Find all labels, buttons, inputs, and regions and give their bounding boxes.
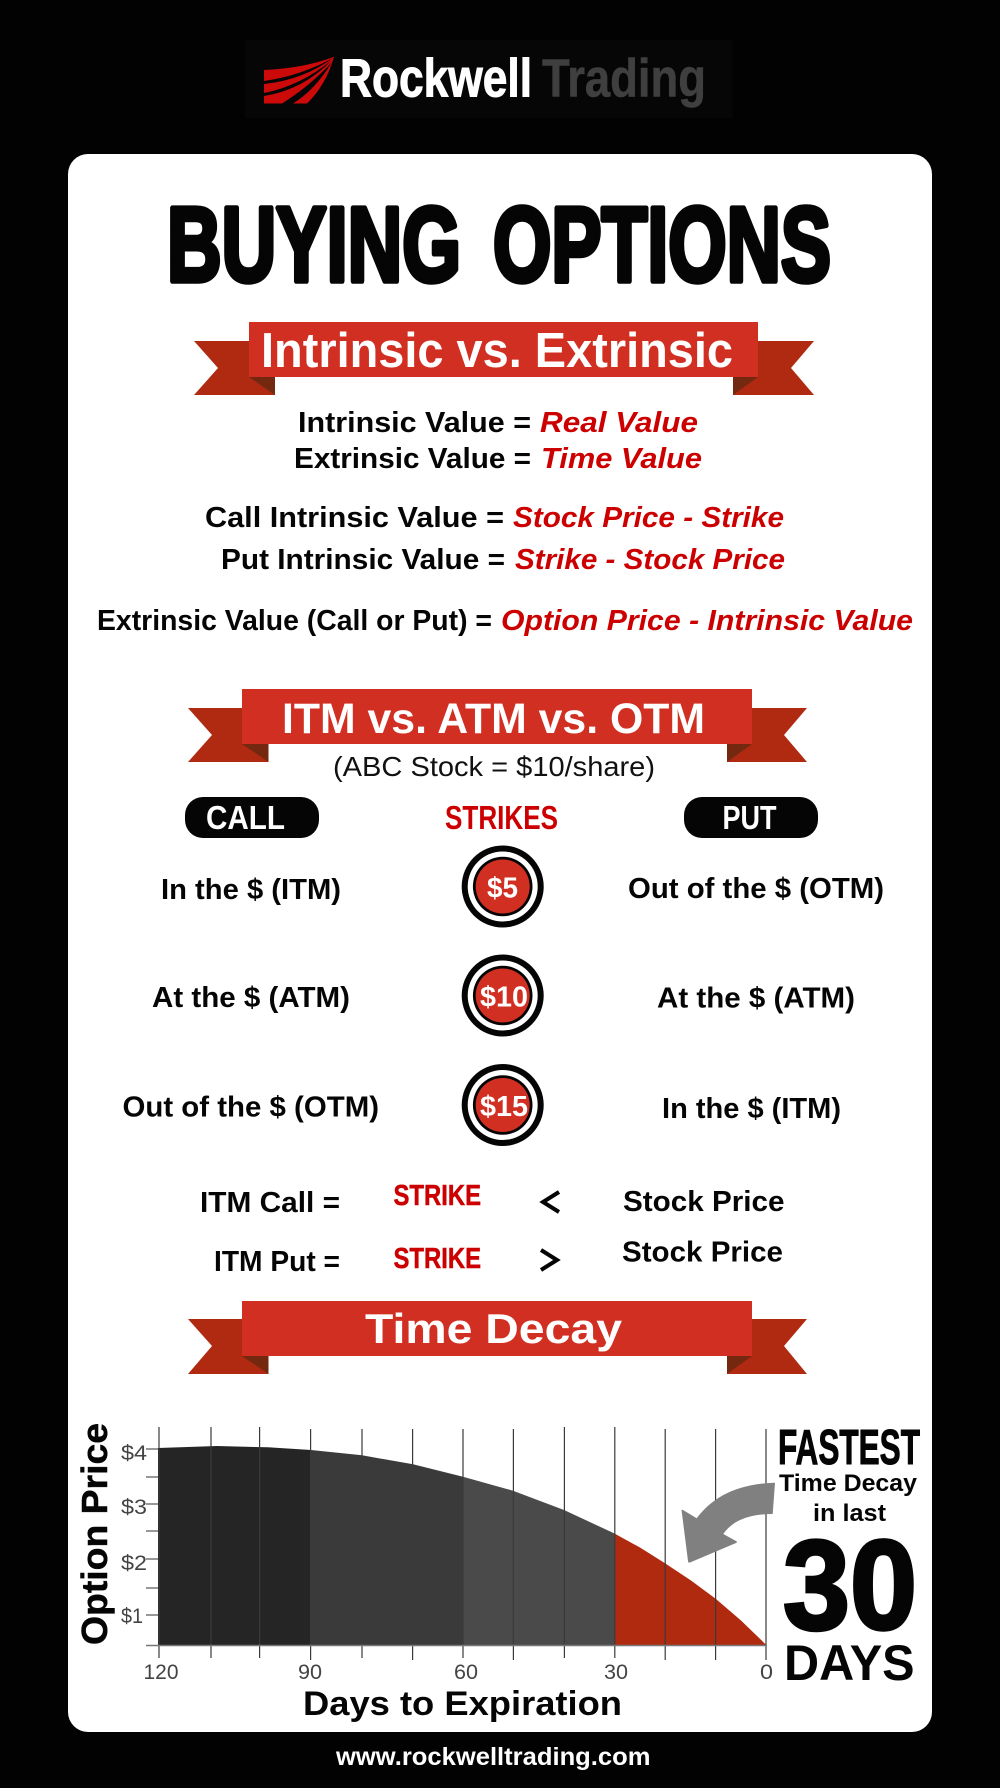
- ribbon: ITM vs. ATM vs. OTM: [188, 689, 807, 762]
- row: $15 strike: In the $ (ITM): [662, 1093, 841, 1125]
- title: BUYING: [167, 186, 461, 304]
- row: $5 strike: [161, 846, 884, 928]
- formula: ITM put: ITM Put =: [214, 1246, 340, 1278]
- text block: value definitions: Extrinsic Value =: [294, 443, 531, 475]
- y axis labels: $1: [121, 1605, 143, 1628]
- heading: STRIKES: STRIKES: [445, 799, 558, 836]
- x axis labels: 60: [454, 1661, 478, 1684]
- pill: PUT: PUT: [722, 799, 776, 836]
- ribbon: Intrinsic vs. Extrinsic: Intrinsic vs. Extrinsic: [261, 324, 733, 378]
- callout: fastest time decay in last 30 days: Time Decay: [779, 1470, 918, 1497]
- x axis labels: [144, 1661, 773, 1684]
- y axis title: Option Price: [74, 1423, 115, 1645]
- footer: website: www.rockwelltrading.com: [335, 1743, 650, 1771]
- icon: $10 badge: [462, 954, 544, 1036]
- y axis labels: $2: [121, 1552, 147, 1575]
- formula: ITM call: [200, 1180, 784, 1219]
- formula: ITM call: ITM Call =: [200, 1187, 340, 1219]
- callout: fastest time decay in last 30 days: DAYS: [784, 1635, 914, 1691]
- x axis labels: 120: [144, 1661, 178, 1684]
- x axis labels: 0: [760, 1661, 773, 1684]
- formula: ITM put: STRIKE: [394, 1243, 481, 1275]
- title: [167, 186, 831, 304]
- logo: Rockwell Trading: Rockwell: [340, 49, 532, 109]
- callout: fastest time decay in last 30 days: in last: [813, 1500, 886, 1527]
- text block: value definitions: [294, 407, 702, 475]
- ribbon: Time Decay: [188, 1301, 807, 1374]
- formula: ITM put: [214, 1236, 783, 1278]
- subtitle: ABC stock price: (ABC Stock = $10/share): [333, 751, 655, 782]
- text block: value definitions: Time Value: [541, 443, 702, 475]
- panel: white card: [68, 154, 932, 1732]
- icon: $15 badge: [462, 1064, 544, 1146]
- logo: Rockwell Trading: Trading: [542, 49, 706, 109]
- pill: CALL: CALL: [206, 799, 285, 836]
- icon: $15 badge: $15: [480, 1091, 528, 1123]
- y axis labels: $4: [121, 1442, 147, 1465]
- icon: $5 badge: [462, 846, 544, 928]
- row: $10 strike: [152, 954, 855, 1036]
- callout: fastest time decay in last 30 days: FASTEST: [778, 1421, 920, 1475]
- arrow: pointing to last 30 days: [682, 1483, 775, 1563]
- row: $5 strike: Out of the $ (OTM): [628, 873, 884, 905]
- row: $15 strike: Out of the $ (OTM): [122, 1092, 379, 1124]
- logo: Rockwell Trading: [245, 40, 733, 118]
- row: $10 strike: At the $ (ATM): [657, 982, 855, 1014]
- pill: CALL: [185, 797, 319, 838]
- pill: PUT: [684, 797, 818, 838]
- icon: red wing: [264, 57, 334, 104]
- callout: fastest time decay in last 30 days: [778, 1421, 920, 1691]
- formula: ITM call: Stock Price: [623, 1186, 784, 1218]
- text block: extrinsic formula: [97, 605, 913, 637]
- formula: ITM call: STRIKE: [394, 1180, 481, 1212]
- icon: $5 badge: $5: [487, 872, 518, 904]
- text block: intrinsic formulas: Stock Price - Strike: [513, 502, 784, 534]
- row: $15 strike: [122, 1064, 841, 1146]
- text block: intrinsic formulas: [205, 502, 785, 576]
- chart area bands: [158, 1440, 766, 1646]
- x axis labels: 90: [298, 1661, 322, 1684]
- ribbon: Time Decay: Time Decay: [365, 1305, 623, 1352]
- ribbon: Intrinsic vs. Extrinsic: [194, 322, 814, 395]
- text block: extrinsic formula: Extrinsic Value (Call or Put) =: [97, 605, 492, 637]
- ribbon: ITM vs. ATM vs. OTM: ITM vs. ATM vs. OTM: [282, 695, 705, 743]
- text block: intrinsic formulas: Strike - Stock Price: [515, 544, 785, 576]
- callout: fastest time decay in last 30 days: 30: [783, 1514, 917, 1656]
- text block: intrinsic formulas: Put Intrinsic Value =: [221, 544, 505, 576]
- formula: ITM put: Stock Price: [622, 1236, 783, 1268]
- x axis labels: 30: [604, 1661, 628, 1684]
- y axis labels: $3: [121, 1496, 147, 1519]
- x axis title: Days to Expiration: [303, 1685, 622, 1723]
- y axis labels: [121, 1442, 147, 1628]
- title: OPTIONS: [493, 186, 831, 304]
- text block: value definitions: Intrinsic Value =: [298, 407, 531, 439]
- row: $5 strike: In the $ (ITM): [161, 874, 341, 906]
- chart: option price time decay: [74, 1423, 773, 1723]
- text block: value definitions: Real Value: [540, 407, 698, 439]
- text block: intrinsic formulas: Call Intrinsic Value =: [205, 502, 504, 534]
- row: $10 strike: At the $ (ATM): [152, 982, 350, 1014]
- icon: $10 badge: $10: [480, 982, 528, 1014]
- text block: extrinsic formula: Option Price - Intrinsic Value: [501, 605, 913, 637]
